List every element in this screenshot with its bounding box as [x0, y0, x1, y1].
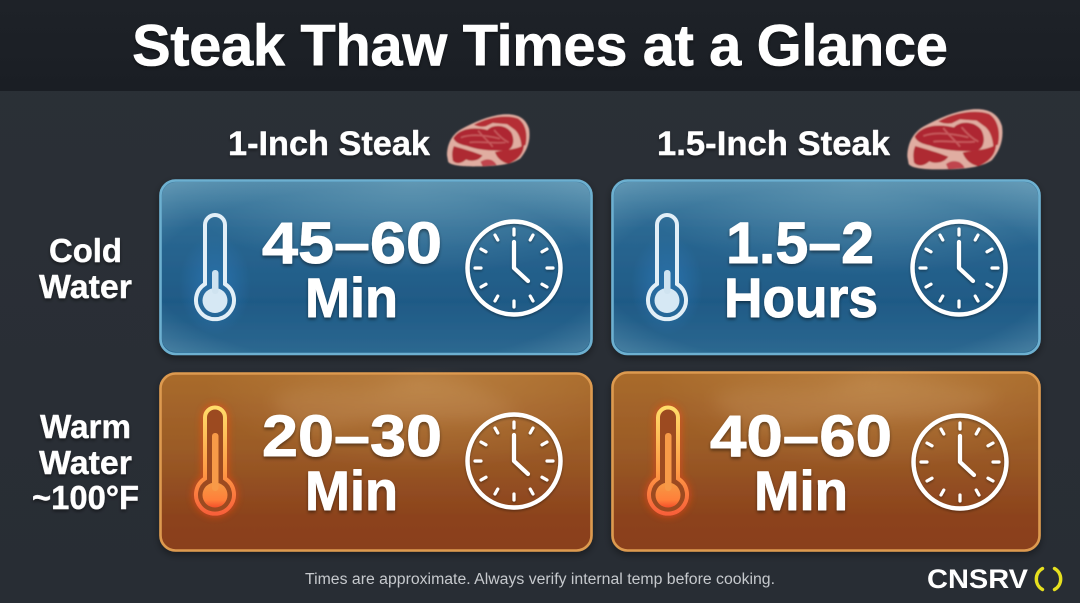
logo: CNSRV: CNSRV	[927, 564, 1028, 594]
row label: warm water	[32, 408, 139, 516]
icon: clock	[914, 416, 1006, 508]
row label: cold water	[39, 232, 132, 305]
value: 40–60 Min: Min	[754, 459, 848, 522]
value: 20–30 Min: Min	[305, 459, 398, 522]
row label: cold water: Water	[39, 268, 132, 305]
icon: hot thermometer	[196, 408, 234, 514]
title: Steak Thaw Times at a Glance	[132, 14, 948, 78]
title band	[0, 0, 1080, 91]
icon: cold thermometer	[196, 215, 234, 319]
value: 20–30 Min	[262, 404, 442, 522]
value: 45–60 Min: 45–60	[262, 211, 442, 276]
column heading: 1-inch steak: 1-Inch Steak	[228, 125, 430, 163]
row label: warm water: Water	[39, 444, 132, 481]
icon: hot thermometer	[649, 408, 687, 514]
value: 40–60 Min	[710, 404, 892, 522]
column heading: 1.5-inch steak: 1.5-Inch Steak	[657, 125, 890, 163]
icon: clock	[468, 222, 560, 314]
panel: warm water 1.5-inch	[612, 372, 1040, 550]
value: 1.5–2 Hours	[724, 211, 878, 329]
icon: cold thermometer	[648, 215, 686, 319]
value: 45–60 Min	[262, 211, 442, 329]
column heading: 1-inch steak	[228, 114, 530, 166]
column heading: 1.5-inch steak	[657, 109, 1002, 169]
value: 1.5–2 Hours: Hours	[724, 266, 878, 329]
panel: cold water 1.5-inch	[612, 180, 1040, 354]
icon: clock	[468, 414, 560, 508]
row label: cold water: Cold	[49, 232, 122, 269]
panel: warm water 1-inch	[160, 374, 592, 550]
icon: raw steak large	[907, 109, 1002, 169]
value: 20–30 Min: 20–30	[262, 404, 442, 469]
icon: raw steak small	[447, 114, 530, 166]
icon: clock	[912, 222, 1006, 314]
row label: warm water: ~100°F	[32, 479, 139, 516]
value: 1.5–2 Hours: 1.5–2	[726, 211, 874, 276]
row label: warm water: Warm	[40, 408, 131, 445]
panel: cold water 1-inch	[160, 180, 592, 354]
icon: yellow ring	[1036, 568, 1061, 590]
value: 40–60 Min: 40–60	[710, 404, 892, 469]
footnote: Times are approximate. Always verify internal temp before cooking.	[305, 571, 775, 588]
value: 45–60 Min: Min	[305, 266, 398, 329]
